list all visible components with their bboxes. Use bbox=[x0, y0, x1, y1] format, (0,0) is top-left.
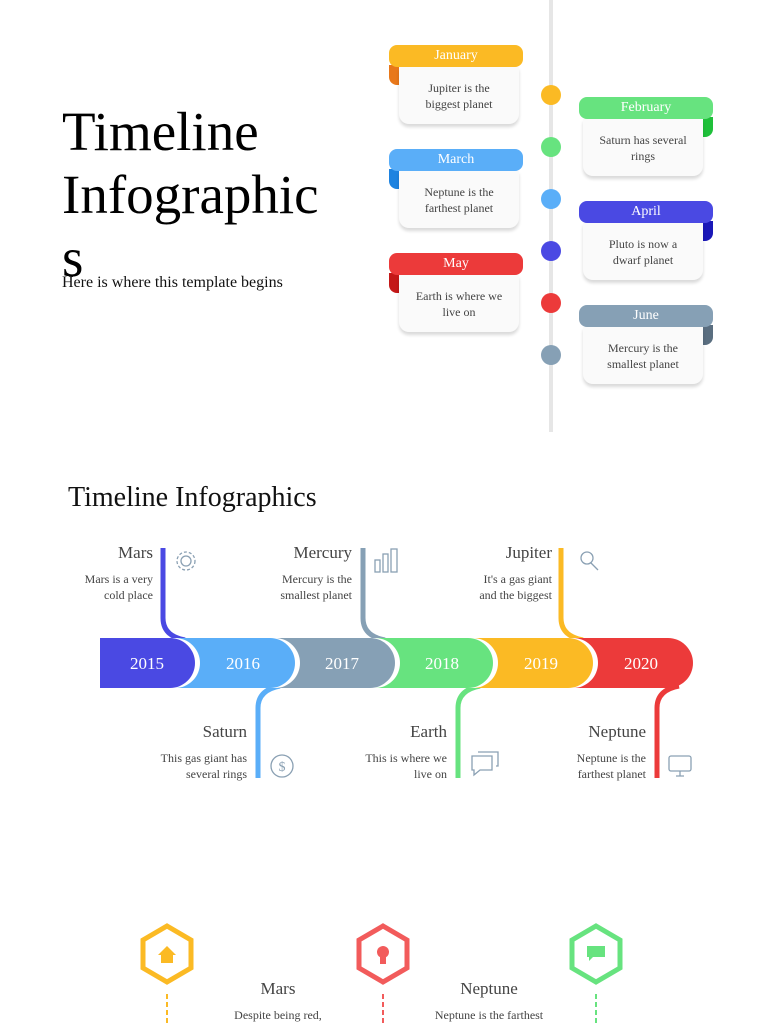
section 3 hexagons: Neptune is the farthest bbox=[435, 1008, 544, 1022]
card: February: Saturn has several bbox=[599, 132, 687, 146]
card: February: rings bbox=[631, 148, 655, 162]
card: February bbox=[579, 97, 713, 180]
section 2 title: Timeline Infographics bbox=[68, 482, 317, 513]
label: Jupiter: and the biggest bbox=[479, 588, 552, 602]
title: Infographic bbox=[62, 164, 319, 225]
vertical timeline line bbox=[549, 0, 553, 432]
label: Mercury: Mercury is the bbox=[282, 572, 352, 586]
card: March: farthest planet bbox=[425, 200, 493, 214]
card: March: Neptune is the bbox=[424, 184, 494, 198]
card: March: March bbox=[438, 152, 474, 167]
card: June: Mercury is the bbox=[608, 340, 678, 354]
label: Earth: Earth bbox=[410, 722, 447, 741]
card: January: Jupiter is the bbox=[428, 80, 490, 94]
card: May: Earth is where we bbox=[416, 288, 502, 302]
label: Saturn: This gas giant has bbox=[161, 751, 247, 765]
icons: $ bbox=[278, 760, 286, 775]
card: April: April bbox=[631, 204, 661, 219]
subtitle: Here is where this template begins bbox=[62, 274, 283, 291]
label: Jupiter bbox=[479, 543, 552, 602]
label: Saturn: several rings bbox=[186, 767, 247, 781]
card: May: live on bbox=[442, 304, 475, 318]
card: June: June bbox=[633, 308, 659, 323]
label: Neptune: farthest planet bbox=[578, 767, 646, 781]
label: Mercury: Mercury bbox=[293, 543, 352, 562]
card: February: February bbox=[621, 100, 671, 115]
icons bbox=[177, 549, 691, 777]
section 3 hexagons: Mars bbox=[261, 979, 295, 998]
ribbon timeline: 2017 bbox=[325, 654, 360, 673]
label: Neptune: Neptune bbox=[588, 722, 646, 741]
section 3 hexagons: Despite being red, bbox=[234, 1008, 322, 1022]
title bbox=[62, 101, 319, 288]
label: Mars: Mars bbox=[118, 543, 153, 562]
dots bbox=[541, 85, 561, 365]
title: Timeline bbox=[62, 101, 259, 162]
label: Jupiter: Jupiter bbox=[506, 543, 552, 562]
label: Neptune bbox=[577, 722, 646, 781]
card: January: biggest planet bbox=[426, 96, 492, 110]
ribbon timeline: 2016 bbox=[226, 654, 260, 673]
ribbon timeline: 2015 bbox=[130, 654, 164, 673]
section 3 hexagons bbox=[140, 923, 622, 1023]
card: June: smallest planet bbox=[607, 356, 679, 370]
card: March bbox=[389, 149, 523, 232]
ribbon timeline: 2018 bbox=[425, 654, 459, 673]
ribbon timeline: 2019 bbox=[524, 654, 558, 673]
label: Neptune: Neptune is the bbox=[577, 751, 646, 765]
label: Mars: cold place bbox=[104, 588, 153, 602]
card: April: Pluto is now a bbox=[609, 236, 677, 250]
label: Mars: Mars is a very bbox=[85, 572, 153, 586]
title: s bbox=[62, 227, 83, 288]
card: April: dwarf planet bbox=[613, 252, 673, 266]
card: January bbox=[389, 45, 523, 128]
label: Earth: This is where we bbox=[365, 751, 447, 765]
label: Jupiter: It's a gas giant bbox=[484, 572, 552, 586]
ribbon timeline: 2020 bbox=[624, 654, 658, 673]
card: January: January bbox=[434, 48, 478, 63]
ribbon timeline bbox=[100, 548, 693, 778]
label: Mercury bbox=[280, 543, 352, 602]
card: May: May bbox=[443, 256, 469, 271]
label: Mercury: smallest planet bbox=[280, 588, 352, 602]
card: June bbox=[579, 305, 713, 388]
label: Earth: live on bbox=[414, 767, 447, 781]
label: Saturn: Saturn bbox=[203, 722, 247, 741]
card: May bbox=[389, 253, 523, 336]
label: Earth bbox=[365, 722, 447, 781]
label: Mars bbox=[85, 543, 153, 602]
section 3 hexagons: Neptune bbox=[460, 979, 518, 998]
card: April bbox=[579, 201, 713, 284]
label: Saturn bbox=[160, 722, 247, 781]
